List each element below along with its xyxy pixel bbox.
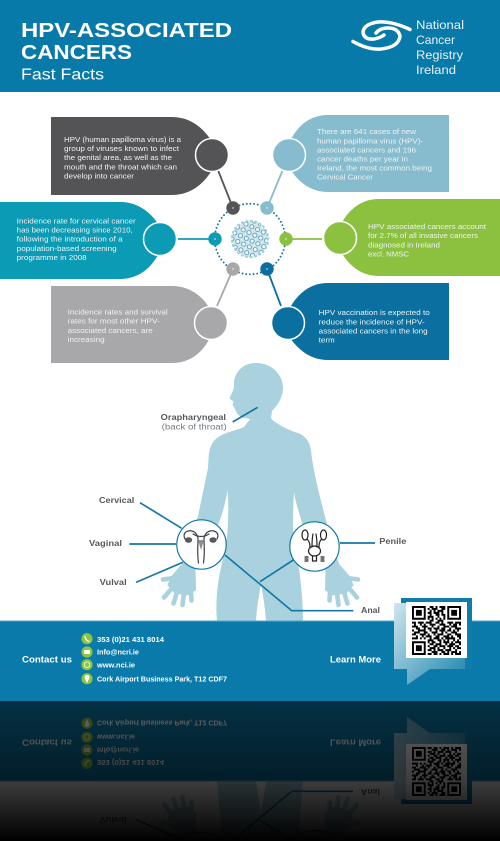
icon: virus — [232, 222, 268, 256]
label: Orapharyngeal: Orapharyngeal — [161, 413, 226, 422]
text: cervical cancer incidence: programme in 2008 — [17, 253, 87, 262]
contact: phone — [81, 633, 165, 644]
text: incidence and survival rates — [68, 307, 168, 344]
text: share of invasive cancers: for 2.7% of all invasive cancers — [368, 231, 478, 240]
text: cases and deaths: There are 641 cases of new — [317, 127, 416, 136]
panel: what HPV is — [51, 117, 240, 215]
text: cervical cancer incidence: following the introduction of a — [17, 235, 123, 244]
text: incidence and survival rates: Incidence rates and survival — [68, 307, 168, 316]
text: share of invasive cancers: excl. NMSC — [368, 249, 409, 258]
contact: address: Cork Airport Business Park, T12 CDF7 — [97, 675, 227, 684]
label: Vaginal: Vaginal — [89, 539, 122, 548]
text: vaccination: reduce the incidence of HPV- — [319, 317, 425, 326]
text: share of invasive cancers: HPV associated cancers account — [368, 222, 487, 231]
contact: email — [81, 646, 139, 658]
logo: National Cancer Registry Ireland: Registry — [416, 48, 464, 62]
text: incidence and survival rates: rates for most other HPV- — [68, 317, 160, 326]
label: Orapharyngeal — [161, 413, 227, 432]
label: Anal: Anal — [361, 606, 380, 615]
title: CANCERS — [21, 41, 132, 64]
label: Penile: Penile — [379, 537, 407, 546]
heading: Learn More: Learn More — [330, 655, 381, 666]
QR code — [412, 606, 461, 655]
text: share of invasive cancers: diagnosed in Ireland — [368, 240, 440, 249]
text: vaccination: associated cancers in the long — [319, 326, 428, 335]
text: vaccination — [319, 308, 430, 345]
text: cervical cancer incidence — [17, 216, 136, 262]
footer band — [0, 598, 500, 701]
heading: Contact us: Contact us — [22, 655, 72, 666]
mirrored reflection below footer — [0, 701, 500, 841]
hands — [163, 565, 358, 605]
panel: share of invasive cancers — [279, 199, 500, 276]
panel: incidence and survival rates — [51, 262, 240, 363]
panel: cases and deaths — [260, 115, 449, 215]
label: Orapharyngeal: (back of throat) — [162, 422, 227, 432]
text: cases and deaths: human papilloma virus (HPV)- — [317, 136, 423, 145]
contact: address — [81, 673, 227, 684]
QR speech bubble — [394, 598, 472, 685]
contact: email: Info@ncri.ie — [97, 648, 139, 656]
logo: National Cancer Registry Ireland: National — [416, 18, 464, 32]
contact: website: www.nci.ie — [96, 660, 135, 670]
icon: male urinary organs — [290, 522, 339, 571]
text: what HPV is: HPV (human papilloma virus) is a — [64, 135, 182, 144]
title: Fast Facts — [21, 66, 104, 84]
logo: National Cancer Registry Ireland — [353, 18, 464, 77]
logo: National Cancer Registry Ireland: Cancer — [416, 33, 455, 47]
text: cervical cancer incidence: has been decreasing since 2010, — [17, 226, 133, 235]
text: vaccination: term — [319, 336, 335, 345]
text: cases and deaths: cancer deaths per year in — [317, 155, 408, 164]
logo: National Cancer Registry Ireland: Ireland — [416, 63, 456, 77]
text: vaccination: HPV vaccination is expected to — [319, 308, 430, 317]
silhouette — [182, 363, 340, 621]
text: what HPV is: the genital area, as well as the — [64, 153, 172, 162]
text: what HPV is: mouth and the throat which can — [64, 162, 177, 171]
panel: cervical cancer incidence — [0, 202, 222, 279]
text: cases and deaths — [317, 127, 432, 182]
text: incidence and survival rates: increasing — [68, 335, 105, 344]
text: cervical cancer incidence: population-based screening — [17, 244, 117, 253]
label: Cervical: Cervical — [99, 496, 134, 505]
contact: website — [81, 659, 135, 670]
text: share of invasive cancers — [368, 222, 487, 258]
panel: vaccination — [260, 262, 449, 360]
text: cases and deaths: Ireland, the most common being — [317, 164, 432, 173]
text: cases and deaths: associated cancers and 196 — [317, 145, 416, 154]
text: cervical cancer incidence: Incidence rate for cervical cancer — [17, 216, 136, 225]
icon: female reproductive organs — [177, 520, 226, 569]
hub: virus and dotted ring — [215, 204, 285, 274]
text: what HPV is — [64, 135, 182, 180]
contact: phone: 353 (0)21 431 8014 — [97, 635, 165, 644]
pointer lines — [129, 407, 375, 611]
title: HPV-ASSOCIATED — [21, 19, 232, 42]
text: incidence and survival rates: associated cancers, are — [68, 326, 153, 335]
text: cases and deaths: Cervical Cancer — [317, 173, 373, 182]
text: what HPV is: develop into cancer — [64, 171, 134, 180]
body diagram — [89, 363, 407, 621]
header band — [0, 0, 500, 92]
text: what HPV is: group of viruses known to infect — [64, 144, 180, 153]
title — [21, 19, 232, 84]
label: Vulval: Vulval — [100, 578, 127, 587]
